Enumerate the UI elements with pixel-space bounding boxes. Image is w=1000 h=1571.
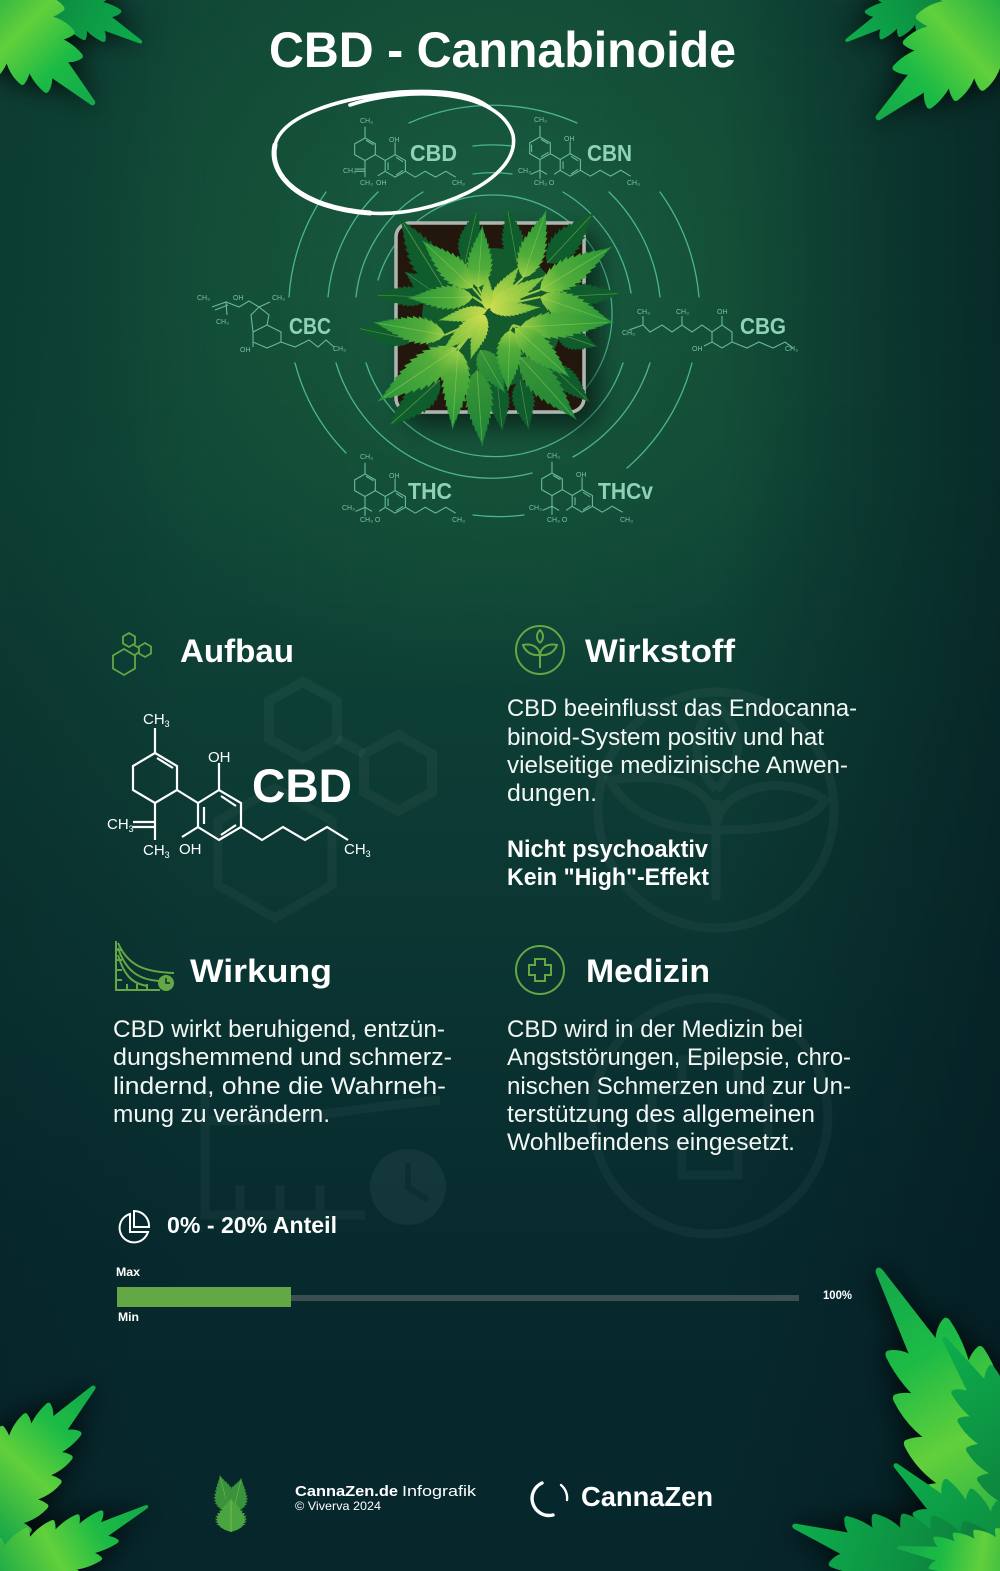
molecule: CBG: CH₃ — [785, 346, 798, 353]
text: copyright: © Viverva 2024 — [295, 1499, 381, 1513]
label: 100%: 100% — [823, 1288, 852, 1302]
text: key facts: Kein "High"-Effekt — [507, 864, 709, 891]
icon: hexagons — [113, 633, 151, 675]
molecule: CBN: CBN — [587, 140, 632, 166]
diagram: CBD structural formula — [107, 711, 371, 860]
text: description: dungen. — [507, 780, 597, 807]
text: description: mung zu verändern. — [113, 1101, 330, 1128]
molecule: CBN: CH₃ — [534, 117, 547, 124]
text: credit label: Infografik — [402, 1484, 477, 1500]
molecule: CBN — [518, 117, 640, 187]
text: key facts: Nicht psychoaktiv — [507, 836, 709, 863]
molecule: CBN: CH₃ O — [534, 180, 555, 187]
diagram: CBD structural formula: OH — [179, 841, 202, 858]
leaves: top left corner — [0, 0, 159, 143]
footer — [208, 1472, 713, 1532]
panel: Wirkstoff — [507, 626, 857, 891]
text: description — [507, 1016, 851, 1156]
text: description: CBD beeinflusst das Endocanna- — [507, 695, 857, 722]
icon: decay chart with clock — [116, 941, 174, 991]
diagram: CBD structural formula: OH — [208, 749, 230, 766]
molecule: CBG — [622, 309, 798, 353]
bar value — [117, 1287, 291, 1307]
molecule: CBD small: CBD — [410, 140, 457, 166]
pot — [396, 223, 584, 412]
molecule: CBC: CH₃ — [216, 319, 229, 326]
bar track — [117, 1295, 799, 1301]
molecule: CBC: OH — [233, 295, 244, 302]
text: description: dungshemmend und schmerz- — [113, 1044, 452, 1071]
molecule: THCv: CH₃ O — [547, 517, 568, 524]
molecule: THC: THC — [408, 478, 452, 504]
molecule: CBG: CH₃ — [676, 309, 689, 316]
text: description — [113, 1016, 452, 1128]
diagram: CBD structural formula: CH — [143, 711, 165, 728]
text: credit name: CannaZen.de — [295, 1484, 398, 1500]
molecule: CBD small: CH₃ — [452, 180, 465, 187]
molecule: CBG: OH — [717, 309, 728, 316]
chart: concentric arcs — [289, 105, 699, 517]
icon: small leaf — [208, 1472, 253, 1532]
heading: Medizin: Medizin — [586, 953, 710, 989]
title: CBD - Cannabinoide — [269, 22, 736, 78]
molecule: THCv: OH — [576, 472, 586, 479]
molecule: THCv: CH₃ — [529, 505, 542, 512]
heading: share: 0% - 20% Anteil — [167, 1212, 337, 1238]
molecule: THC: CH₃ — [452, 517, 465, 524]
molecule: CBG: CBG — [740, 313, 786, 339]
molecule: CBC: OH — [240, 347, 250, 354]
stems — [445, 278, 540, 350]
back leaves — [353, 202, 624, 438]
molecule: CBC: CH₃ — [272, 295, 285, 302]
text: description: Wohlbefindens eingesetzt. — [507, 1129, 795, 1156]
logo text: CannaZen — [581, 1481, 713, 1512]
diagram: CBD structural formula: 3 — [165, 719, 170, 729]
plant in pot — [353, 202, 624, 448]
icon: plant in circle — [516, 626, 564, 674]
text: description: terstützung des allgemeinen — [507, 1101, 815, 1128]
diagram: CBD structural formula: CBD — [252, 759, 352, 812]
diagram: CBD structural formula: CH — [107, 816, 129, 833]
watermark icons — [205, 682, 834, 1234]
molecule: CBC: CBC — [289, 313, 331, 339]
molecule: CBD small: CH₃ — [360, 118, 373, 125]
molecule: CBD small: OH — [389, 137, 400, 144]
molecule: THC: CH₃ O — [360, 517, 381, 524]
text: description: Angststörungen, Epilepsie, chro- — [507, 1044, 851, 1071]
panel: Medizin — [507, 946, 851, 1156]
molecule: CBG: CH₃ — [622, 330, 635, 337]
front leaves — [368, 205, 620, 431]
panel: Wirkung — [113, 941, 452, 1128]
diagram: CBD structural formula: 3 — [366, 849, 371, 859]
molecule: CBN: CH₃ — [627, 180, 640, 187]
text: description: vielseitige medizinische Anwen- — [507, 752, 848, 779]
molecule: THCv: THCv — [598, 478, 653, 504]
molecule: THC: CH₃ — [342, 505, 355, 512]
icon: medical cross in circle — [516, 946, 564, 994]
molecule: THCv — [529, 453, 653, 524]
molecule: CBN: OH — [564, 136, 574, 143]
text: description — [507, 695, 857, 807]
icon: pie chart — [120, 1211, 149, 1242]
molecule: CBC — [197, 295, 346, 354]
panel: Aufbau — [107, 633, 371, 860]
heading: Wirkstoff: Wirkstoff — [585, 633, 735, 669]
darker front leaves — [462, 344, 588, 448]
molecule: CBD small: OH — [376, 180, 386, 187]
icon: CannaZen logo ring — [532, 1483, 567, 1515]
molecule: CBG: CH₃ — [637, 309, 650, 316]
diagram: CBD structural formula: 3 — [129, 824, 134, 834]
text: description: CBD wirkt beruhigend, entzün- — [113, 1016, 445, 1043]
heading: Wirkung: Wirkung — [190, 953, 332, 989]
molecule: CBD small — [343, 118, 465, 187]
text: description: lindernd, ohne die Wahrneh- — [113, 1073, 446, 1100]
molecule: CBD small: CH₃ — [343, 168, 356, 175]
dark foliage under the plant — [422, 248, 562, 388]
hand-drawn highlight circle around CBD — [274, 91, 514, 213]
molecule: CBC: CH₃ — [333, 346, 346, 353]
molecule: CBG: OH — [692, 346, 702, 353]
text: description: CBD wird in der Medizin bei — [507, 1016, 803, 1043]
molecule: THCv: CH₃ — [620, 517, 633, 524]
young centre leaves — [435, 261, 551, 362]
heading: Aufbau: Aufbau — [180, 633, 294, 669]
leaves: bottom left corner — [0, 1354, 164, 1571]
leaves: top right corner — [829, 0, 1000, 163]
molecule: CBN: CH₃ — [518, 168, 531, 175]
molecule: CBD small: CH₃ — [360, 180, 373, 187]
molecule: THC: OH — [389, 473, 400, 480]
diagram: CBD structural formula: 3 — [165, 850, 170, 860]
label: Min: Min — [118, 1310, 139, 1324]
molecule: THCv: CH₃ — [547, 453, 560, 460]
diagram: CBD structural formula: CH — [344, 841, 366, 858]
diagram: CBD structural formula: CH — [143, 842, 165, 859]
molecule: CBC: CH₃ — [197, 295, 210, 302]
molecule: THC: CH₃ — [360, 454, 373, 461]
label: Max: Max — [116, 1265, 140, 1279]
text: key facts — [507, 836, 709, 891]
panel: CBD share bar — [116, 1211, 852, 1324]
text: description: nischen Schmerzen und zur Un- — [507, 1073, 851, 1100]
molecule: THC — [342, 454, 465, 524]
leaves: bottom right corner — [777, 1233, 1000, 1571]
text: description: binoid-System positiv und hat — [507, 724, 824, 751]
